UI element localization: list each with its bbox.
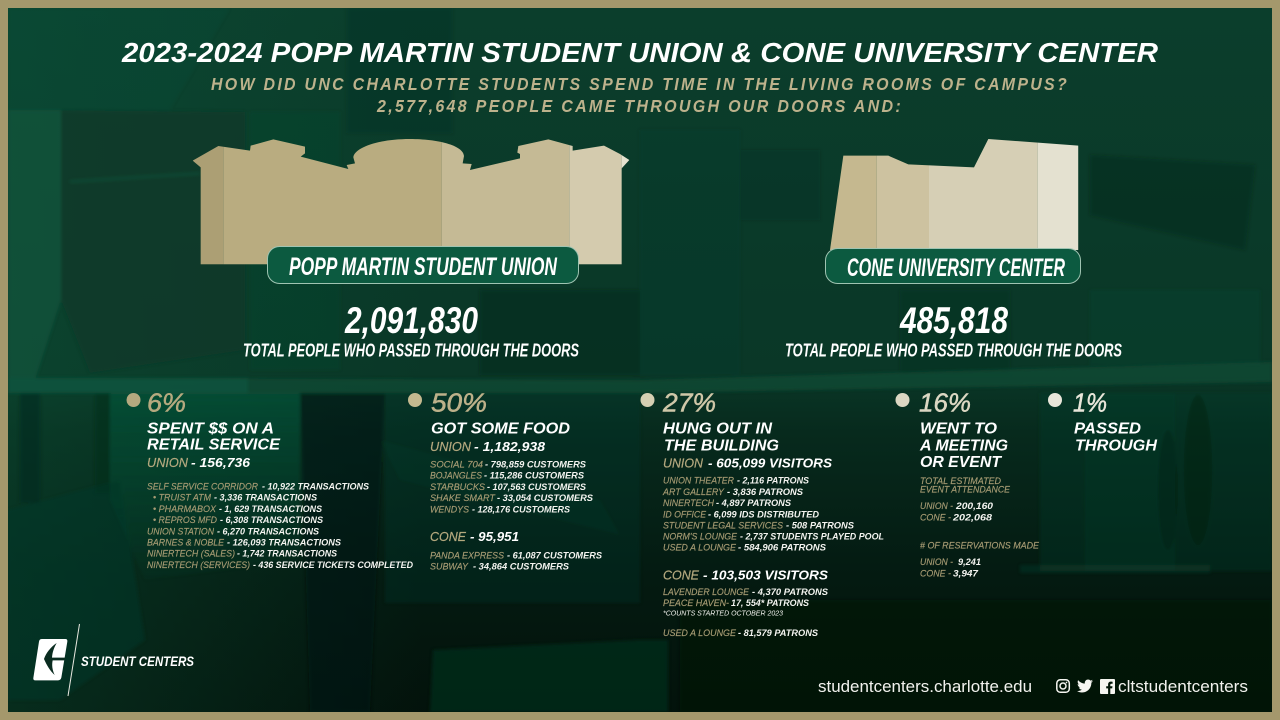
cone visitors list: - 81,579 PATRONS <box>738 628 819 639</box>
cone food list: - 34,864 CUSTOMERS <box>473 561 570 572</box>
event attendance: EVENT ATTENDANCE <box>920 484 1011 494</box>
union visitors list: - 584,906 PATRONS <box>738 543 827 554</box>
union food list: - 107,563 CUSTOMERS <box>487 482 587 493</box>
event attendance <box>920 476 1011 523</box>
cone visitors list: - 4,370 PATRONS <box>752 587 829 598</box>
union food list: WENDYS <box>430 504 470 515</box>
heading: HUNG OUT IN <box>663 420 772 438</box>
panel: 6% retail service <box>126 390 413 571</box>
reservations: CONE - <box>920 568 951 579</box>
retail detail list: NINERTECH (SERVICES) <box>147 560 250 571</box>
union visitors list: STUDENT LEGAL SERVICES <box>663 521 784 532</box>
reservations: 9,241 <box>958 557 981 568</box>
event attendance: 202,068 <box>952 512 993 523</box>
retail detail list: BARNES & NOBLE <box>147 537 225 548</box>
union visitors list: ID OFFICE <box>663 509 707 520</box>
union visitors total: UNION <box>663 455 704 470</box>
icon: Popp Martin Student Union building silhouette <box>192 139 630 264</box>
heading <box>147 420 281 453</box>
panel: Cone University Center name pill: CONE UNIVERSITY CENTER <box>847 254 1065 282</box>
union food list: SHAKE SMART <box>430 493 496 504</box>
heading: PASSED <box>1074 420 1141 438</box>
retail detail list: - 6,270 TRANSACTIONS <box>217 526 320 537</box>
panel: Cone University Center name pill <box>826 248 1080 284</box>
union visitors total: - 605,099 VISITORS <box>708 455 832 470</box>
cone visitors list: *COUNTS STARTED OCTOBER 2023 <box>663 611 783 618</box>
cone food list: SUBWAY <box>430 561 469 572</box>
union visitors list: - 508 PATRONS <box>786 521 855 532</box>
event attendance: 200,160 <box>955 501 994 512</box>
union food list: SOCIAL 704 <box>430 460 483 471</box>
panel: Popp Martin Student Union name pill: POPP MARTIN STUDENT UNION <box>289 253 558 281</box>
union food list <box>430 460 594 515</box>
union visitors list: NORM'S LOUNGE <box>663 532 738 543</box>
icon: Cone University Center building silhouette <box>830 139 1078 250</box>
heading: WENT TO <box>920 420 998 438</box>
bullet and percent: 16% <box>919 390 971 418</box>
reservations: UNION - <box>920 557 953 568</box>
cone visitors list: LAVENDER LOUNGE <box>663 587 750 598</box>
bullet and percent <box>896 390 971 418</box>
heading: RETAIL SERVICE <box>147 436 281 453</box>
stat: Union total <box>243 300 579 360</box>
logo: Charlotte C and Student Centers: STUDENT CENTERS <box>81 653 195 669</box>
heading: THROUGH <box>1075 438 1157 454</box>
bullet and percent <box>640 390 716 418</box>
union visitors list: NINERTECH <box>663 498 714 509</box>
union visitors list: UNION THEATER <box>663 476 734 487</box>
bullet and percent: 1% <box>1073 390 1107 418</box>
heading: OR EVENT <box>920 454 1002 471</box>
event attendance: UNION - <box>920 501 953 512</box>
union food list: - 128,176 CUSTOMERS <box>472 504 571 515</box>
retail detail list: - 1, 629 TRANSACTIONS <box>219 504 323 515</box>
heading: THE BUILDING <box>664 438 779 454</box>
stat: Cone total: TOTAL PEOPLE WHO PASSED THROUGH THE DOORS <box>785 340 1122 360</box>
heading <box>1074 420 1157 454</box>
union visitors list: - 3,836 PATRONS <box>727 487 804 498</box>
bullet and percent: 27% <box>662 390 716 418</box>
panel: 1% passed through <box>1048 390 1157 454</box>
reservations: 3,947 <box>953 568 979 579</box>
subtitle <box>211 74 1069 116</box>
icon: twitter bird <box>1077 680 1093 692</box>
cone food total <box>430 529 519 544</box>
union food total <box>430 439 546 454</box>
stat: Cone total: 485,818 <box>899 300 1008 341</box>
stat: Union total: 2,091,830 <box>344 300 478 341</box>
panel: 27% hung out <box>640 390 884 639</box>
bullet and percent: 50% <box>431 390 487 418</box>
cone visitors list: PEACE HAVEN- <box>663 598 729 609</box>
heading: A MEETING <box>919 438 1008 454</box>
cone visitors total: CONE <box>663 567 699 582</box>
subtitle: 2,577,648 PEOPLE CAME THROUGH OUR DOORS AND: <box>376 96 903 116</box>
cone food total: - 95,951 <box>470 529 519 544</box>
icon: instagram <box>1057 680 1069 692</box>
panel: Popp Martin Student Union name pill <box>268 246 578 284</box>
cone food list: PANDA EXPRESS <box>430 550 505 561</box>
retail detail list: SELF SERVICE CORRIDOR <box>147 481 258 492</box>
union food total: - 1,182,938 <box>474 439 546 454</box>
retail detail list: - 3,336 TRANSACTIONS <box>214 493 318 504</box>
bullet and percent <box>408 390 487 418</box>
stat: Cone total <box>785 300 1122 360</box>
cone visitors list: USED A LOUNGE <box>663 628 737 639</box>
union visitors list: - 4,897 PATRONS <box>716 498 792 509</box>
retail detail list: - 126,093 TRANSACTIONS <box>227 537 342 548</box>
cone visitors total: - 103,503 VISITORS <box>703 567 828 582</box>
cone food total: CONE <box>430 529 466 544</box>
heading: SPENT $$ ON A <box>147 420 274 438</box>
logo: Charlotte C and Student Centers <box>33 624 195 696</box>
stat: Union total: TOTAL PEOPLE WHO PASSED THROUGH THE DOORS <box>243 340 579 360</box>
retail detail list <box>147 481 413 571</box>
union food list: STARBUCKS <box>430 482 486 493</box>
title: 2023-2024 POPP MARTIN STUDENT UNION & CONE UNIVERSITY CENTER <box>121 37 1159 68</box>
union visitors list: ART GALLERY <box>662 487 725 498</box>
panel: 50% food <box>408 390 603 572</box>
union visitors list: - 2,116 PATRONS <box>737 476 810 487</box>
heading <box>663 420 779 454</box>
retail detail list: - 436 SERVICE TICKETS COMPLETED <box>253 560 413 571</box>
subtitle: HOW DID UNC CHARLOTTE STUDENTS SPEND TIME IN THE LIVING ROOMS OF CAMPUS? <box>211 74 1069 94</box>
bullet and percent: 6% <box>147 390 186 418</box>
reservations <box>920 540 1040 579</box>
union food list: - 33,054 CUSTOMERS <box>497 493 594 504</box>
retail detail list: • REPROS MFD <box>153 515 217 526</box>
website url: studentcenters.charlotte.edu <box>818 677 1032 696</box>
union total: - 156,736 <box>191 455 251 470</box>
cone food list <box>430 550 603 572</box>
union visitors list <box>662 476 884 554</box>
cone visitors list <box>663 587 829 639</box>
reservations: # OF RESERVATIONS MADE <box>920 540 1040 551</box>
retail detail list: - 10,922 TRANSACTIONS <box>262 481 370 492</box>
retail detail list: • PHARMABOX <box>153 504 217 515</box>
retail detail list: NINERTECH (SALES) <box>147 549 235 560</box>
retail detail list: • TRUIST ATM <box>153 493 211 504</box>
union total <box>147 455 251 470</box>
icon: C mark <box>33 639 67 680</box>
retail detail list: - 6,308 TRANSACTIONS <box>220 515 324 526</box>
union visitors list: - 2,737 STUDENTS PLAYED POOL <box>740 532 884 543</box>
union visitors list: - 6,099 IDS DISTRIBUTED <box>708 509 819 520</box>
retail detail list: - 1,742 TRANSACTIONS <box>237 549 338 560</box>
heading <box>919 420 1008 471</box>
bullet and percent <box>126 390 186 418</box>
event attendance: CONE - <box>920 512 951 523</box>
event attendance: TOTAL ESTIMATED <box>920 476 1001 486</box>
heading: GOT SOME FOOD <box>431 420 570 438</box>
union total: UNION <box>147 455 189 470</box>
icon: facebook <box>1100 679 1115 694</box>
cone food list: - 61,087 CUSTOMERS <box>507 550 603 561</box>
union food list: - 115,286 CUSTOMERS <box>484 471 585 482</box>
union food list: BOJANGLES <box>430 471 483 482</box>
panel: 16% meeting or event <box>896 390 1040 579</box>
cone visitors list: 17, 554* PATRONS <box>731 598 810 609</box>
union food list: - 798,859 CUSTOMERS <box>485 460 587 471</box>
union visitors list: USED A LOUNGE <box>663 543 737 554</box>
social handle: cltstudentcenters <box>1118 677 1248 696</box>
union food total: UNION <box>430 439 472 454</box>
retail detail list: UNION STATION <box>147 526 214 537</box>
